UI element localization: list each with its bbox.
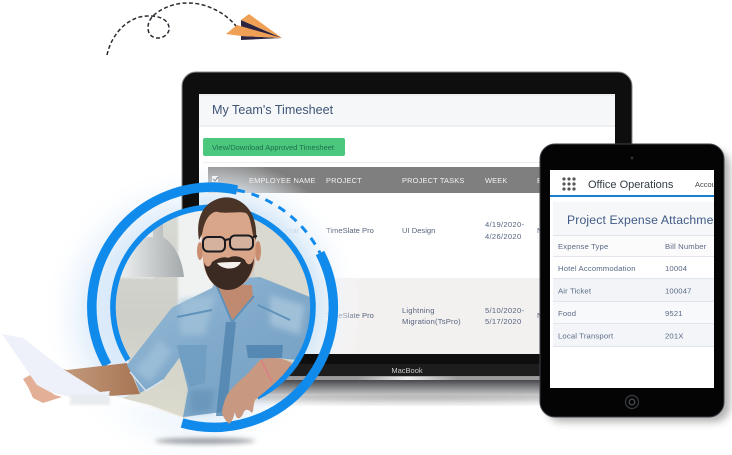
portrait badge bbox=[2, 187, 333, 444]
app bar: Accounts bbox=[695, 180, 726, 189]
sheet of paper and left hand bbox=[2, 334, 110, 405]
tablet body bbox=[540, 144, 724, 417]
laptop base shadow bbox=[230, 390, 610, 402]
tablet screen bbox=[550, 170, 726, 388]
expense table: 100047 bbox=[665, 286, 692, 296]
table row 1: TimeSlate Pro bbox=[326, 226, 374, 235]
shirt collar bbox=[177, 284, 290, 322]
table row 1: 4/19/2020- bbox=[485, 220, 524, 229]
office photo background bbox=[116, 210, 310, 418]
wristband bbox=[261, 360, 272, 382]
expense table: 201X bbox=[665, 332, 684, 340]
green download button: View/Download Approved Timesheet bbox=[212, 143, 335, 152]
forearm bbox=[63, 363, 140, 396]
laptop bbox=[182, 72, 632, 402]
table row 1: 4/26/2020 bbox=[485, 232, 521, 241]
table row 1: UI Design bbox=[402, 226, 435, 235]
expense table: Air Ticket bbox=[558, 286, 592, 296]
ears bbox=[197, 241, 261, 261]
plane icon bbox=[226, 14, 282, 40]
smile bbox=[217, 262, 241, 269]
outer blue ring lower arc bbox=[182, 253, 333, 427]
beard bbox=[204, 256, 254, 290]
table row 1 bbox=[285, 222, 540, 239]
expense table: Bill Number bbox=[665, 242, 707, 251]
man body bbox=[63, 277, 316, 417]
page title: My Team's Timesheet bbox=[212, 103, 334, 117]
shirt placket bbox=[216, 322, 236, 416]
green download button bbox=[203, 138, 345, 156]
blue tint over the table near the portrait bbox=[199, 157, 359, 354]
desk fade bbox=[60, 395, 183, 440]
right forearm and hand bbox=[222, 358, 292, 423]
shirt highlights bbox=[135, 295, 305, 412]
laptop screen bbox=[199, 94, 615, 354]
pendant lamp bbox=[131, 224, 184, 277]
laptop bezel bbox=[182, 72, 632, 376]
glasses bbox=[203, 236, 257, 252]
floor shadow bbox=[155, 438, 255, 444]
neck opening bbox=[215, 285, 253, 320]
macbook strip bbox=[183, 364, 631, 376]
table header bbox=[203, 162, 540, 193]
table row 1: R. Kumar bbox=[267, 226, 300, 235]
table header: E bbox=[537, 176, 542, 185]
expense table: 9521 bbox=[665, 309, 683, 318]
table header: WEEK bbox=[485, 176, 508, 185]
left hand bbox=[23, 375, 62, 403]
table row 2: 5/17/2020 bbox=[485, 317, 521, 326]
table row 2 bbox=[326, 278, 540, 354]
paper bbox=[2, 334, 110, 397]
table row 2: TimeSlate Pro bbox=[326, 311, 374, 320]
table row 2: N bbox=[537, 311, 542, 320]
denim shirt bbox=[127, 277, 316, 417]
man head bbox=[197, 197, 261, 290]
expense page title: Project Expense Attachment bbox=[567, 213, 724, 227]
soft blue glow behind portrait bbox=[30, 165, 340, 455]
table row 2: 5/10/2020- bbox=[485, 306, 524, 315]
macbook label: MacBook bbox=[391, 366, 423, 375]
paper plane with dashed flight path bbox=[107, 3, 282, 55]
laptop base bbox=[250, 379, 580, 394]
expense table: Food bbox=[558, 309, 576, 318]
left pocket bbox=[177, 345, 207, 387]
laptop hinge bbox=[250, 376, 550, 380]
dashed flight path bbox=[107, 3, 236, 55]
table header: PROJECT TASKS bbox=[402, 176, 465, 185]
expense table: Local Transport bbox=[558, 332, 614, 340]
tablet bbox=[540, 144, 730, 422]
expense table bbox=[553, 236, 714, 347]
sleeve cuff bbox=[130, 372, 163, 391]
face bbox=[201, 206, 256, 290]
table header: EMPLOYEE NAME bbox=[249, 176, 316, 185]
table row 2: Lightning bbox=[402, 306, 435, 315]
dashed ring segment bbox=[237, 190, 320, 253]
app bar bbox=[550, 177, 726, 197]
blurred desk reflection bbox=[70, 395, 110, 405]
outer blue ring upper arc bbox=[92, 187, 237, 365]
table row 1: N bbox=[537, 226, 542, 235]
expense table: Hotel Accommodation bbox=[558, 264, 636, 273]
tablet home button bbox=[626, 396, 638, 408]
table header: PROJECT bbox=[326, 176, 362, 185]
tablet camera bbox=[630, 156, 634, 160]
right pocket flap bbox=[246, 345, 283, 358]
expense table: 10004 bbox=[665, 264, 688, 273]
tablet shadow bbox=[546, 150, 730, 422]
hair bbox=[198, 197, 256, 240]
app bar: Office Operations bbox=[588, 179, 674, 191]
expense table: Expense Type bbox=[558, 242, 608, 251]
inner blue ring bbox=[113, 207, 313, 397]
page header band bbox=[199, 94, 615, 127]
expense page title bbox=[553, 202, 724, 236]
table row 2: Migration(TsPro) bbox=[402, 317, 461, 326]
